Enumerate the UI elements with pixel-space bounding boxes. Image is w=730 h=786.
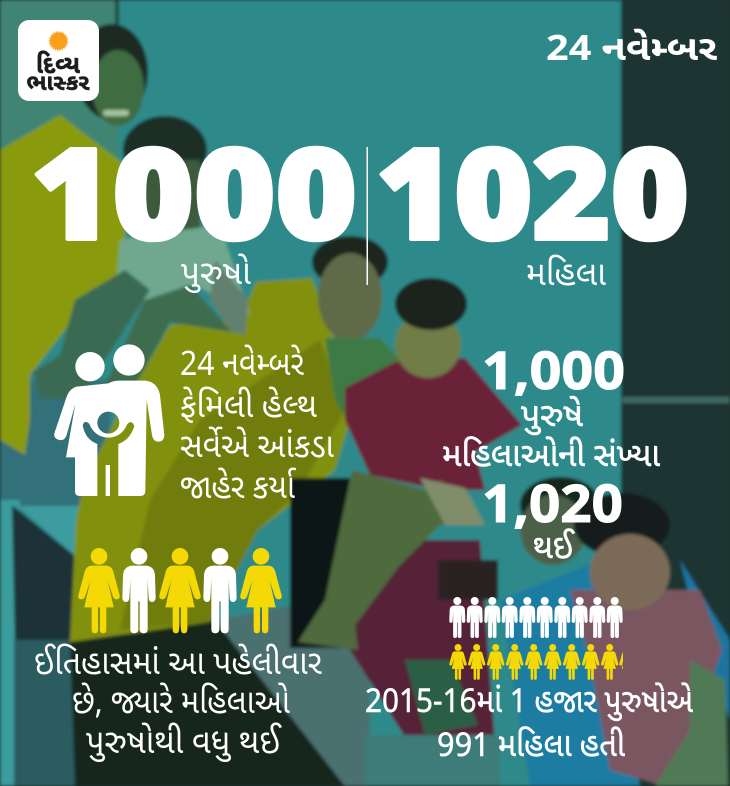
divider bbox=[366, 147, 368, 285]
pictogram: alternating women and men bbox=[78, 548, 282, 633]
stat: 1000 men: પુરુષો bbox=[181, 253, 251, 298]
text: first time in history: ઈતિહાસમાં આ પહેલીવાર bbox=[34, 642, 322, 688]
logo sun bbox=[50, 32, 67, 50]
callout: sex ratio rise: 1,020 bbox=[482, 476, 623, 544]
stat: 1020 women: મહિલા bbox=[526, 254, 606, 299]
logo wordmark bbox=[26, 50, 90, 99]
callout: sex ratio rise: થઈ bbox=[533, 528, 575, 572]
text: 2015-16 comparison bbox=[365, 682, 693, 770]
logo wordmark: દિવ્ય bbox=[36, 50, 80, 84]
logo wordmark: ભાસ્કર bbox=[26, 70, 90, 99]
text: family health survey note: સર્વેએ આંકડા bbox=[180, 426, 334, 471]
text: family health survey note: ફેમિલી હેલ્થ bbox=[180, 385, 317, 431]
stat: 1020 women: 1020 bbox=[376, 127, 689, 291]
text: family health survey note bbox=[180, 343, 334, 512]
text: 2015-16 comparison: 2015-16માં 1 હજાર પુરુષોએ bbox=[365, 682, 693, 726]
callout: sex ratio rise: પુરુષે bbox=[521, 396, 583, 440]
icon: family bbox=[54, 344, 164, 496]
text: family health survey note: 24 નવેમ્બરે bbox=[180, 343, 304, 389]
callout: sex ratio rise: મહિલાઓની સંખ્યા bbox=[442, 436, 660, 480]
stat: 1000 men: 1000 bbox=[31, 127, 357, 291]
text: first time in history: પુરુષોથી વધુ થઈ bbox=[86, 722, 282, 767]
text: 2015-16 comparison: 991 મહિલા હતી bbox=[437, 726, 625, 770]
callout: sex ratio rise: 1,000 bbox=[482, 343, 625, 411]
date heading: 24 નવેમ્બર bbox=[546, 29, 717, 75]
saree left piece bbox=[0, 115, 125, 455]
callout: sex ratio rise bbox=[442, 343, 660, 572]
pictogram: ten men row bbox=[449, 597, 623, 638]
text: first time in history bbox=[34, 642, 322, 767]
pictogram: women row (991 of 1000) bbox=[449, 644, 637, 680]
saree right lobe bbox=[70, 278, 356, 642]
text: family health survey note: જાહેર કર્યા bbox=[180, 466, 297, 512]
brand logo: Divya Bhaskar bbox=[18, 20, 99, 101]
text: first time in history: છે, જ્યારે મહિલાઓ bbox=[72, 681, 290, 727]
